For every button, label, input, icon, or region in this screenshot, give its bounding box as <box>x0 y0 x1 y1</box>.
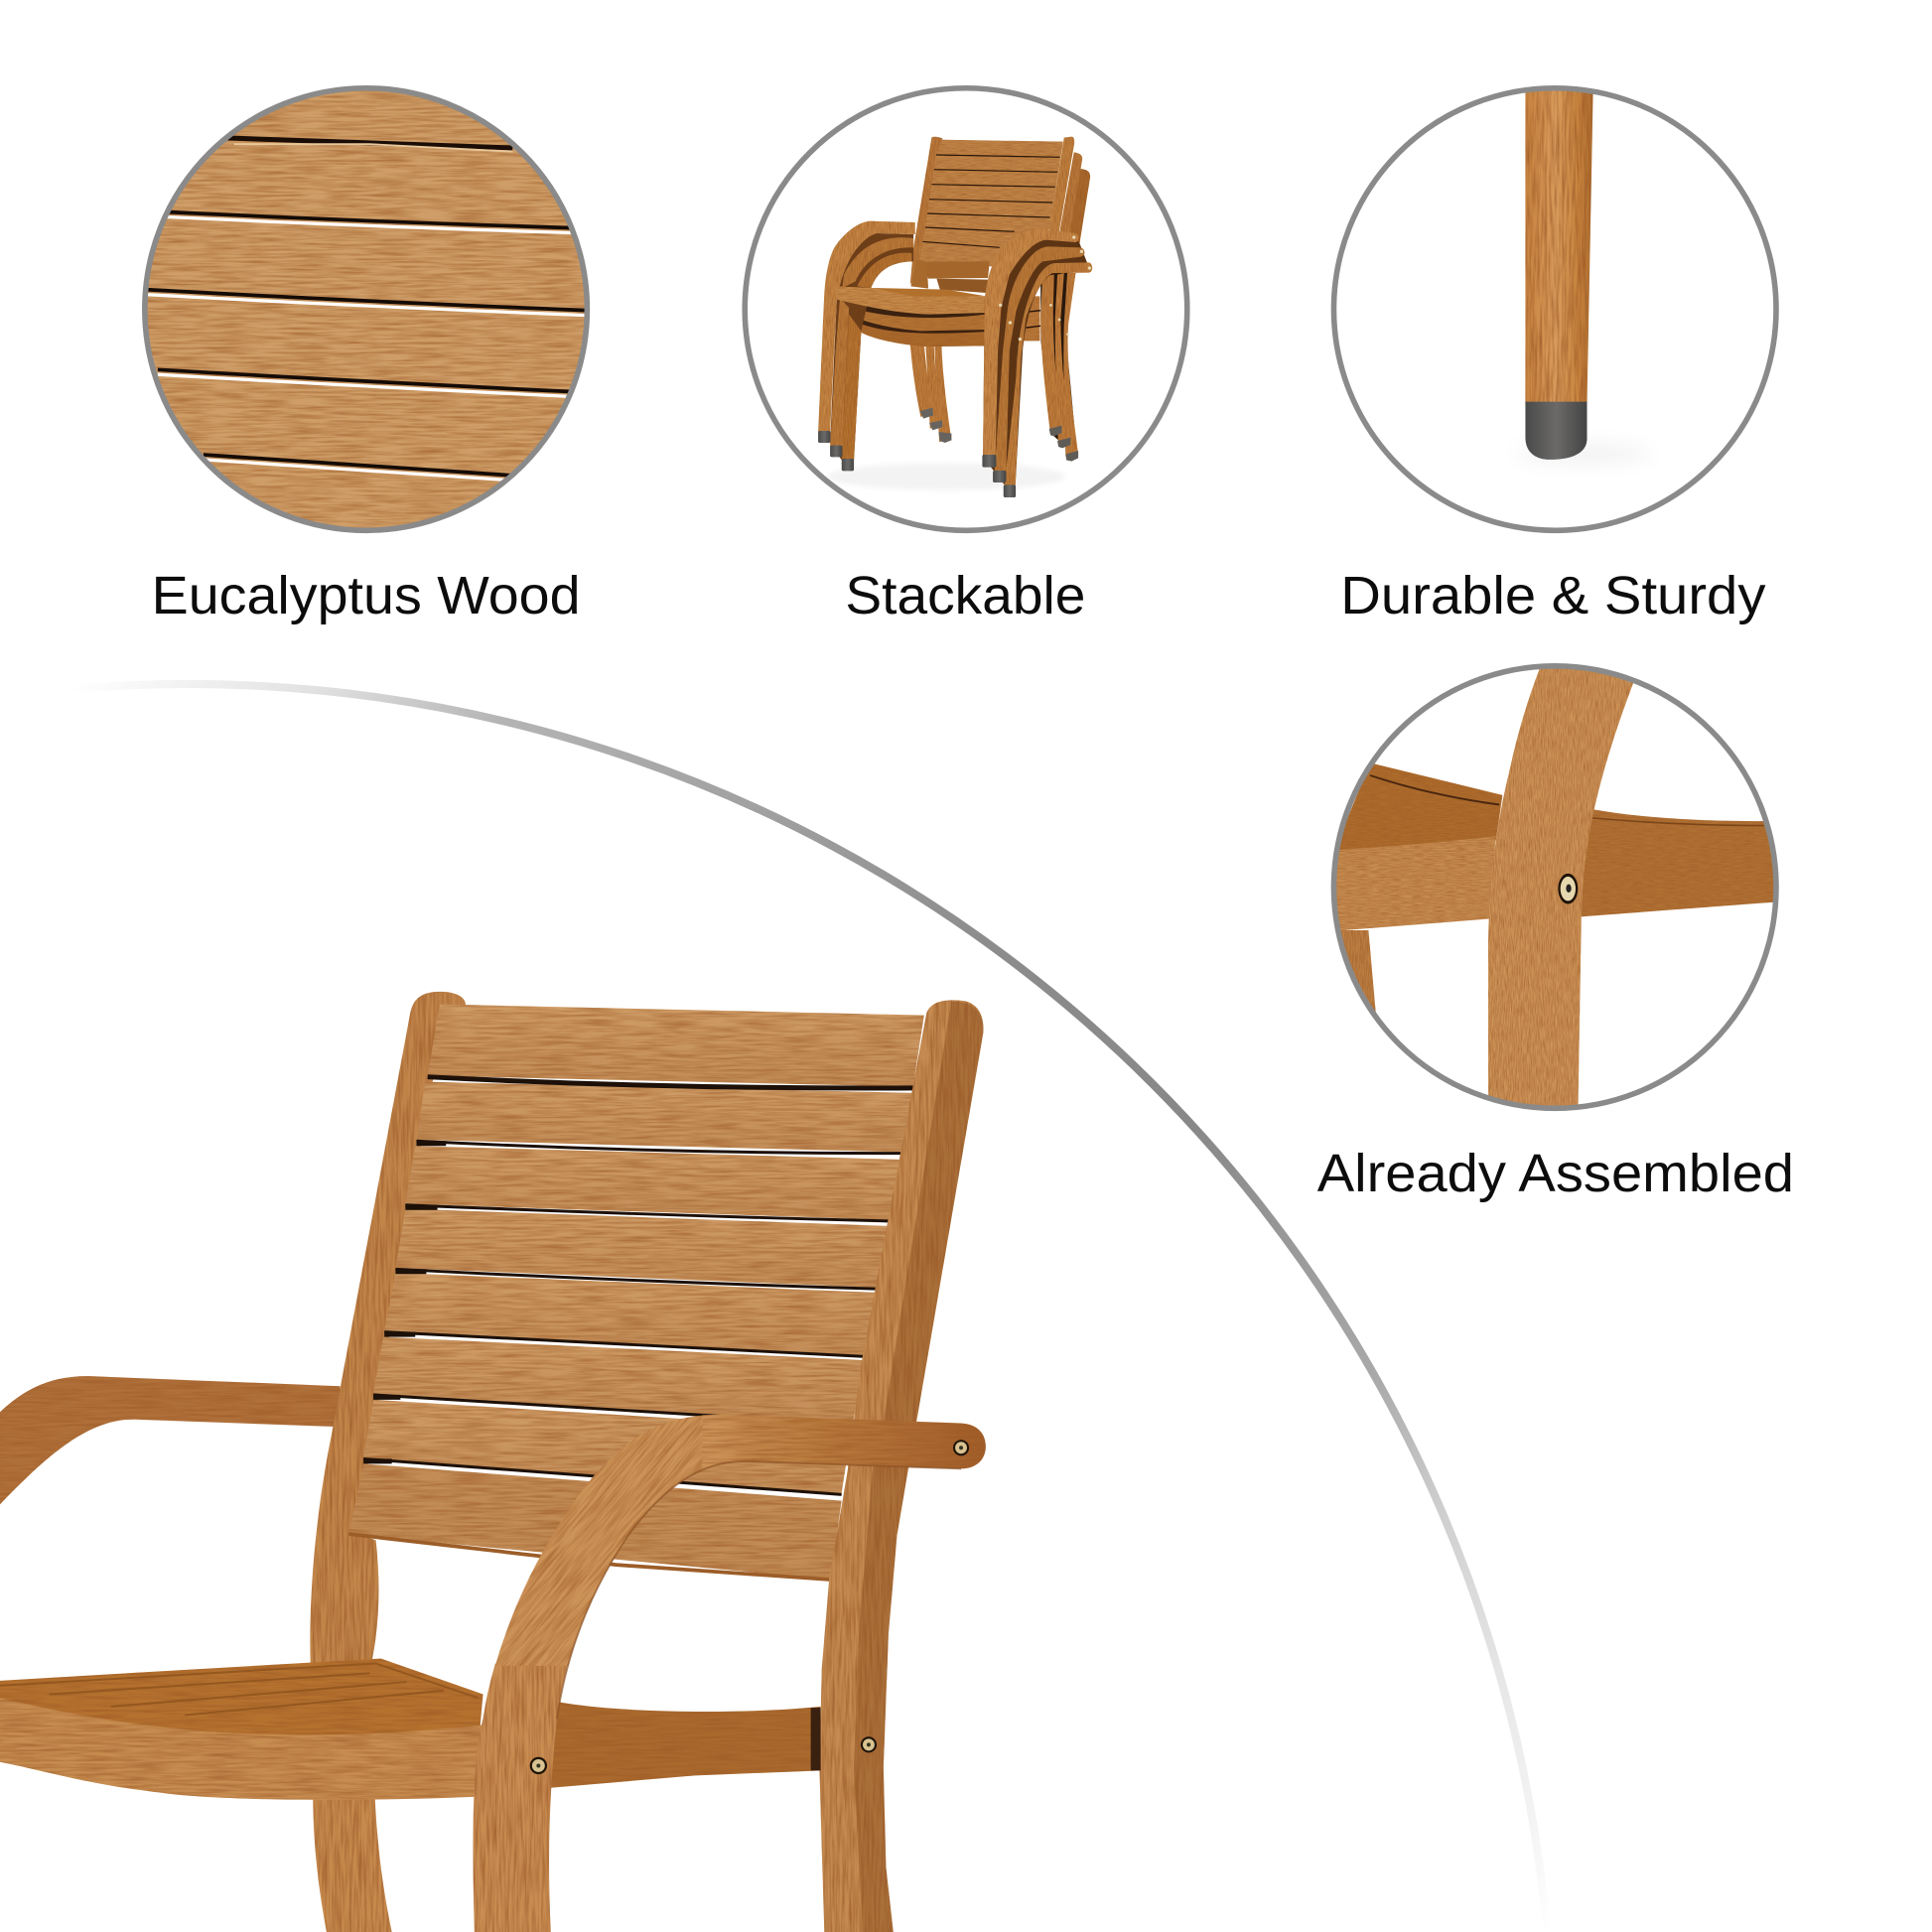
rear left leg <box>313 1793 392 1932</box>
seat underlay <box>836 298 986 346</box>
label: Already Assembled <box>1317 1145 1794 1203</box>
slat gaps <box>363 1077 913 1494</box>
arm curved section <box>495 1416 703 1666</box>
under rails <box>920 261 990 279</box>
top chair right post <box>1049 137 1074 231</box>
arm inner shadow <box>557 1461 961 1719</box>
small leg <box>1340 930 1376 1016</box>
seat lip and slat lines <box>0 1663 479 1716</box>
circle ring <box>145 88 587 530</box>
rear legs <box>910 344 951 442</box>
front right feet <box>982 455 1016 497</box>
left back post <box>310 992 466 1666</box>
bolts <box>530 1440 969 1774</box>
rear right section <box>1021 296 1039 341</box>
left arm <box>0 1376 341 1504</box>
label: Stackable <box>845 567 1085 625</box>
right arm underlay <box>983 229 1090 484</box>
back posts of lower chairs <box>1066 169 1090 258</box>
left arm underlay <box>830 233 913 460</box>
feature: stackable <box>745 88 1187 625</box>
curved post <box>1488 662 1641 1115</box>
front right arm B <box>995 246 1084 472</box>
lower seats <box>859 323 986 346</box>
wood close-up <box>136 81 598 537</box>
feature: already assembled <box>1317 662 1794 1203</box>
screws <box>999 235 1091 341</box>
arm straight section <box>702 1415 986 1468</box>
front leg lower section <box>473 1663 568 1932</box>
circle ring <box>745 88 1187 530</box>
feature: eucalyptus wood <box>136 81 598 625</box>
top chair back <box>917 140 1063 268</box>
chair leg close-up <box>1525 91 1618 460</box>
front right arm C <box>1005 262 1092 484</box>
rail left <box>1330 836 1496 931</box>
rail right <box>1579 808 1780 917</box>
front left leg and arm B <box>830 237 913 447</box>
main chair photo <box>0 992 986 1932</box>
label: Eucalyptus Wood <box>152 567 581 625</box>
bolt <box>1558 874 1578 904</box>
back slat lines <box>921 155 1059 247</box>
joint close-up <box>1330 662 1780 1115</box>
front left leg and arm A <box>818 221 915 432</box>
seat front rail <box>0 1698 483 1800</box>
front left leg and arm C <box>842 253 911 460</box>
circle ring <box>1333 88 1776 530</box>
right back post <box>819 1000 983 1932</box>
decorative arc behind main chair <box>73 684 1547 1928</box>
lower lip of back panel <box>348 1534 830 1580</box>
seat left <box>1333 762 1502 852</box>
front left feet <box>818 431 854 471</box>
front right arm A <box>983 228 1078 457</box>
label: Durable & Sturdy <box>1340 567 1766 625</box>
top seat <box>872 288 986 298</box>
side rail <box>551 1701 821 1788</box>
circle ring <box>1333 666 1776 1108</box>
stacked chairs <box>818 137 1092 497</box>
seat surface <box>0 1658 483 1756</box>
right arm and front leg <box>473 1414 986 1932</box>
back slats <box>348 1004 924 1580</box>
top chair left post <box>910 137 942 285</box>
feature: durable and sturdy <box>1333 86 1776 625</box>
